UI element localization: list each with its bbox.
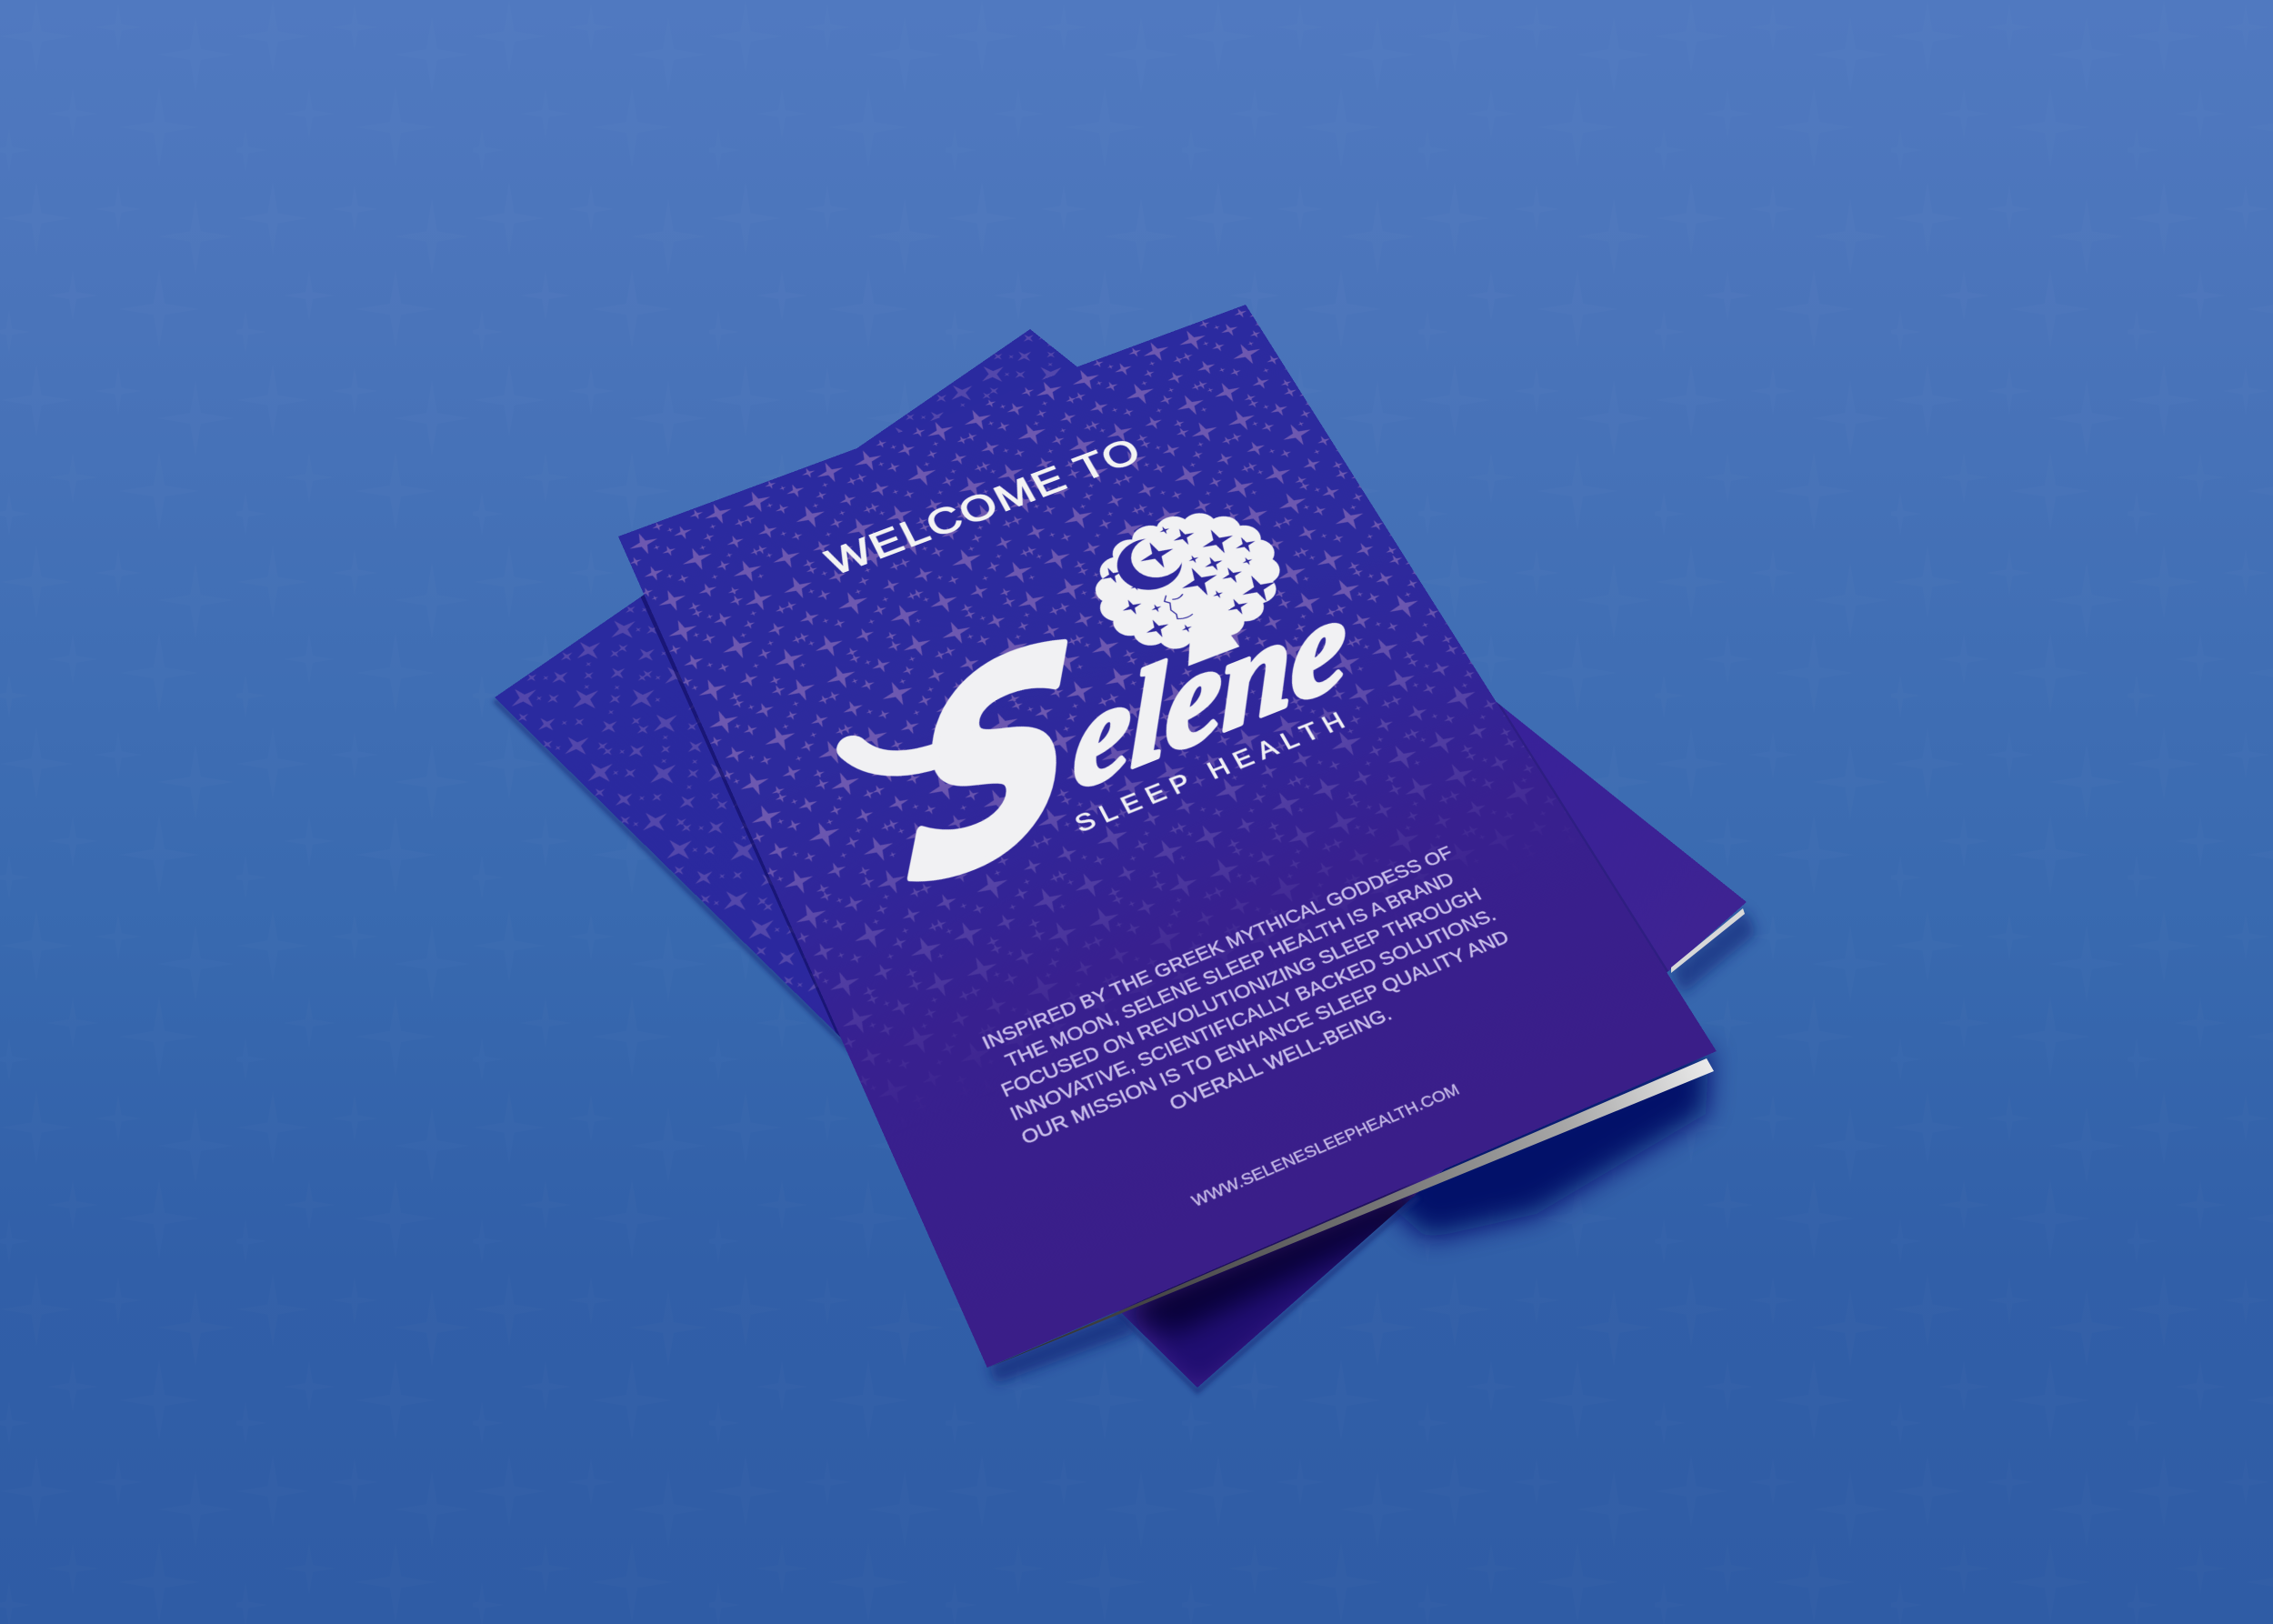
body text: FOCUSED ON REVOLUTIONIZING SLEEP THROUGH — [997, 884, 1485, 1101]
back brochure paper edge — [1671, 908, 1745, 973]
logo: hair stars — [1088, 500, 1288, 653]
shadow on back brochure — [640, 595, 1740, 1388]
website address: WWW.SELENESLEEPHEALTH.COM — [1188, 1080, 1462, 1210]
body text: OVERALL WELL-BEING. — [1166, 1003, 1396, 1115]
body text: OUR MISSION IS TO ENHANCE SLEEP QUALITY AND — [1017, 926, 1513, 1148]
logo: face profile lines — [1162, 590, 1194, 622]
back brochure star pattern — [512, 335, 1061, 991]
back brochure — [495, 329, 1747, 1388]
heading: welcome to: WELCOME TO — [819, 430, 1149, 583]
body text — [979, 842, 1513, 1148]
logo: Selene wordmark — [783, 484, 1487, 956]
shadow and paper edges between the brochures — [640, 595, 1745, 1388]
logo: crescent moon — [1106, 528, 1197, 598]
logo tagline: SLEEP HEALTH — [1071, 706, 1357, 837]
front brochure cover — [618, 305, 1717, 1368]
logo: Selene wordmark: S — [819, 573, 1056, 867]
logo: Selene wordmark: elene — [997, 555, 1314, 764]
body text: INNOVATIVE, SCIENTIFICALLY BACKED SOLUTIONS. — [1006, 905, 1499, 1125]
cover star pattern — [629, 309, 1555, 1088]
logo: afro silhouette with moon and stars — [819, 513, 1346, 882]
front brochure paper edge — [988, 1058, 1714, 1368]
body text: THE MOON, SELENE SLEEP HEALTH IS A BRAND — [1002, 868, 1457, 1071]
body text: INSPIRED BY THE GREEK MYTHICAL GODDESS OF — [979, 842, 1457, 1054]
